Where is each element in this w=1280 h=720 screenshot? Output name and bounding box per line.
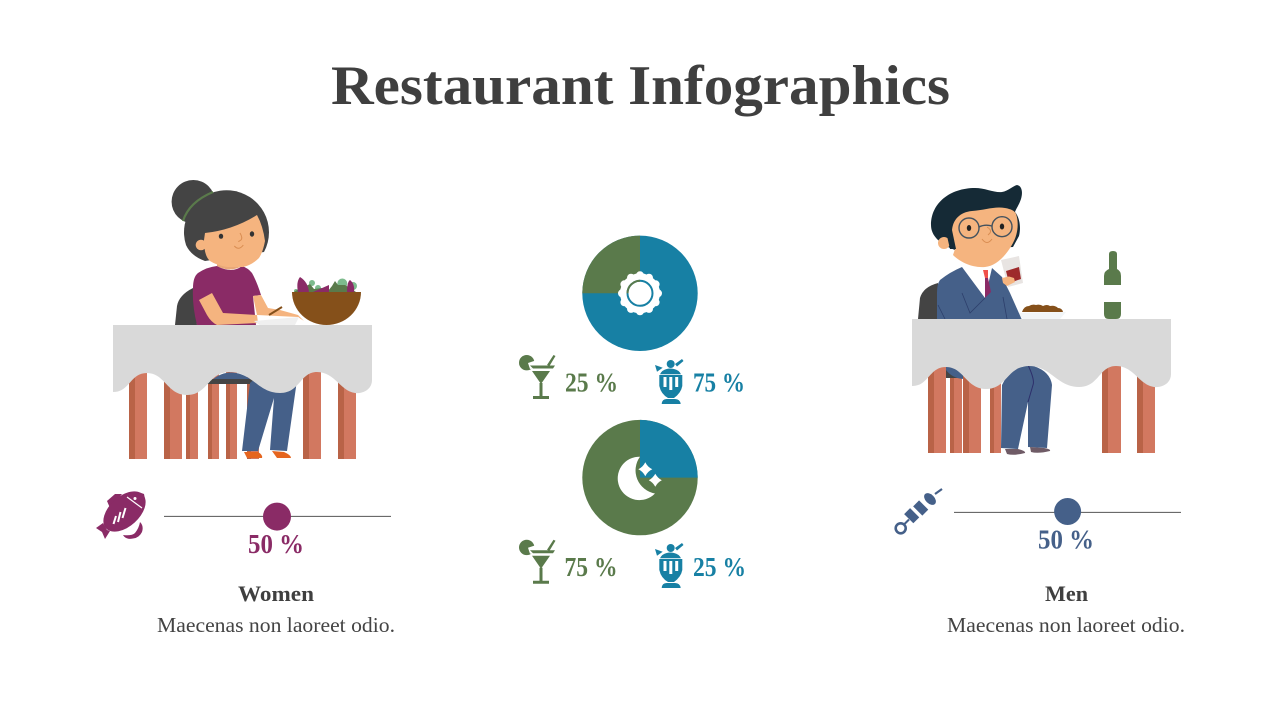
glass <box>1001 256 1023 287</box>
face <box>952 207 1018 267</box>
value: sundae 25: 25 % <box>693 552 746 582</box>
icon: cocktail <box>519 355 556 399</box>
jacket lines <box>938 293 1007 319</box>
chopstick <box>269 307 282 315</box>
eyes <box>967 224 1004 231</box>
jacket <box>937 267 1022 320</box>
salad <box>294 277 357 293</box>
table legs <box>928 364 1155 453</box>
arms <box>199 293 304 325</box>
value: cocktail 75: 75 % <box>564 552 618 582</box>
shirt collar <box>960 262 1004 302</box>
nose and smile <box>234 233 243 248</box>
thigh <box>212 372 252 380</box>
donut chart: lunch <box>582 236 698 351</box>
icon: sundae <box>655 359 684 404</box>
food <box>1022 305 1063 312</box>
percent: men: 50 % <box>1038 524 1094 554</box>
panel: lunch and dinner charts <box>519 236 746 588</box>
donut chart: dinner <box>582 420 698 535</box>
panel: men <box>896 185 1185 637</box>
description: women: Maecenas non laoreet odio. <box>157 613 395 637</box>
table cloth <box>912 319 1171 389</box>
icon: sundae <box>655 543 684 588</box>
shirt <box>193 266 261 325</box>
glasses <box>959 217 1012 238</box>
panel: women <box>96 180 395 637</box>
percent: women: 50 % <box>248 529 304 559</box>
icon: fish <box>96 484 153 539</box>
title: Restaurant Infographics <box>331 55 950 117</box>
hair sideburn <box>947 230 956 249</box>
icon: moon and stars <box>618 457 662 500</box>
label: men: Men <box>1045 581 1088 606</box>
nose and smile <box>982 227 992 242</box>
trousers <box>242 372 297 451</box>
hand <box>1002 276 1015 286</box>
slider knob <box>1054 498 1081 525</box>
slider line <box>954 511 1181 513</box>
slider line <box>164 515 391 517</box>
ear <box>196 240 206 250</box>
illustration: woman at table <box>113 180 372 459</box>
hair <box>931 185 1022 250</box>
hair bun <box>172 180 215 223</box>
table legs <box>129 370 356 459</box>
chair back <box>175 288 197 325</box>
icon: cocktail <box>519 540 556 584</box>
plate <box>254 317 299 325</box>
trouser crease <box>1028 365 1033 402</box>
table cloth <box>113 325 372 395</box>
seat thigh <box>946 366 963 379</box>
wine <box>1006 267 1021 283</box>
illustration: man at table <box>912 185 1171 455</box>
description: men: Maecenas non laoreet odio. <box>947 613 1185 637</box>
value: cocktail 25: 25 % <box>565 368 618 398</box>
chair seat <box>946 368 963 378</box>
bowl <box>292 292 361 325</box>
label: women: Women <box>238 581 314 606</box>
shoes <box>244 451 291 458</box>
chair back <box>918 283 945 319</box>
face <box>204 215 265 267</box>
value: sundae 75: 75 % <box>693 368 745 398</box>
ear <box>938 237 950 249</box>
hair <box>184 190 269 261</box>
tie <box>985 278 991 298</box>
icon: skewer <box>896 489 942 533</box>
shoes <box>1005 447 1050 455</box>
neck <box>217 262 242 270</box>
plate <box>1017 312 1066 319</box>
eyes <box>219 231 254 239</box>
trousers <box>1001 365 1052 449</box>
bottle <box>1104 251 1121 319</box>
chair seat <box>206 379 254 384</box>
icon: sun gear <box>618 271 662 315</box>
slider knob <box>263 503 291 531</box>
hair band <box>183 192 213 221</box>
